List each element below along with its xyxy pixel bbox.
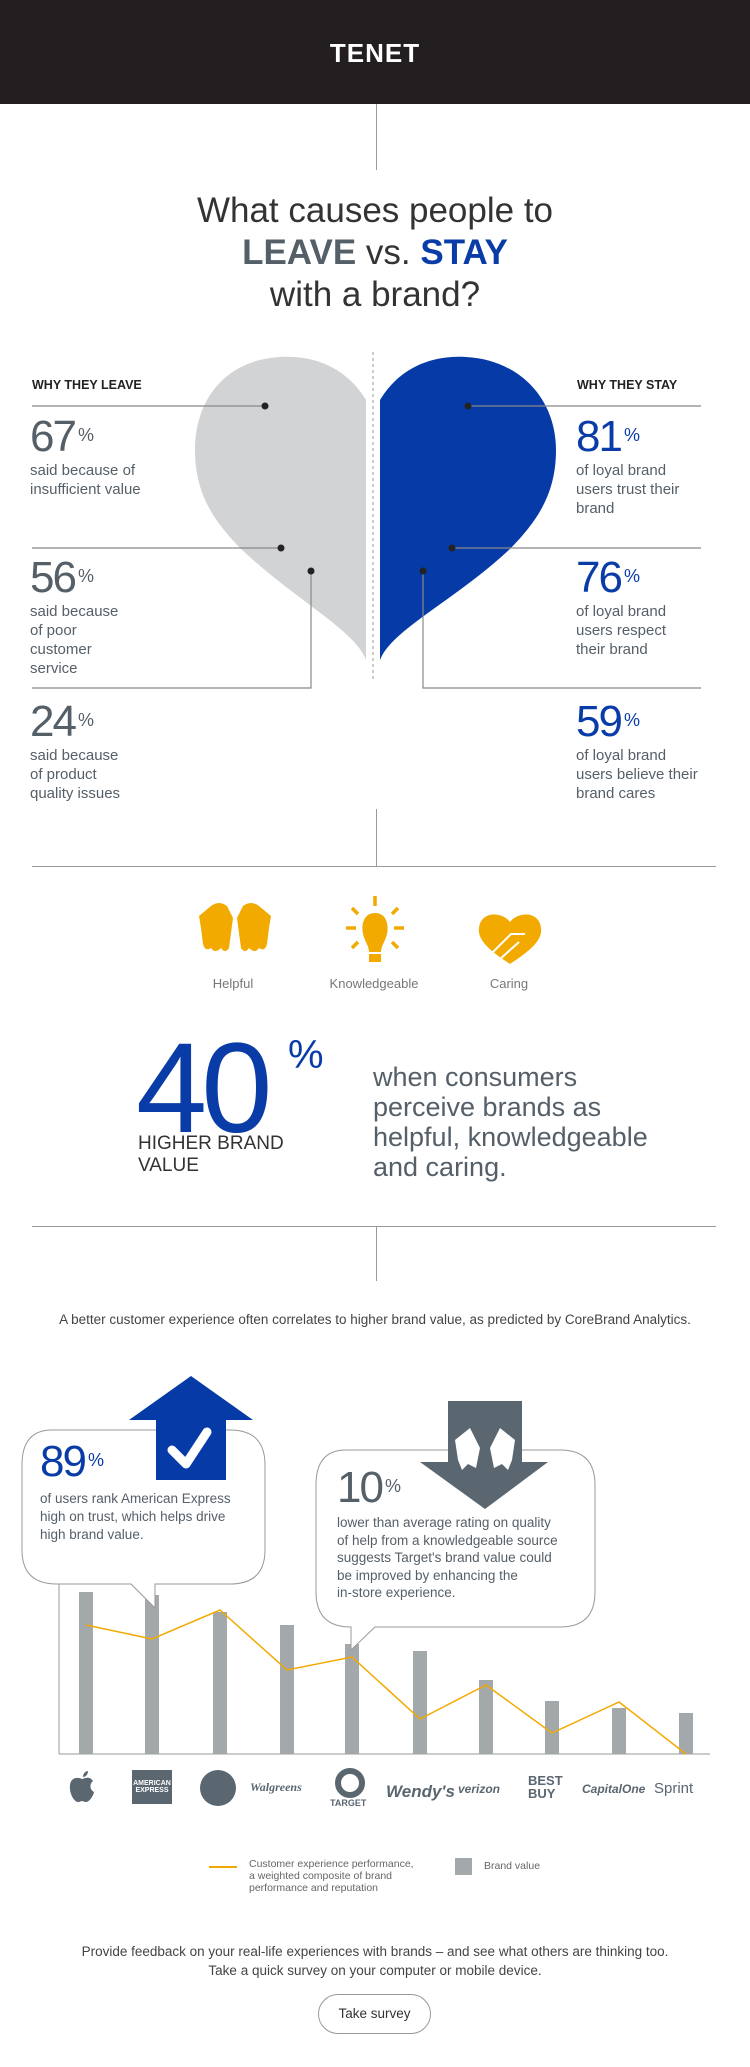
40% description: when consumers <box>373 1062 577 1092</box>
40% stat <box>136 1017 324 1176</box>
stat 76%: 76% <box>576 553 640 602</box>
stat 81%: brand <box>576 500 614 517</box>
stat 59%: of loyal brand <box>576 747 666 764</box>
title: LEAVE vs. STAY <box>242 233 508 272</box>
brand logos <box>70 1768 694 1808</box>
stat 56%: said because <box>30 603 118 620</box>
stat 76%: their brand <box>576 641 648 658</box>
40% stat: 40 <box>136 1017 266 1160</box>
callout text: 89%: of users rank American Express <box>40 1491 231 1506</box>
stat 56%: of poor <box>30 622 77 639</box>
callout: american express <box>22 1376 596 1651</box>
legend: performance and reputation <box>249 1882 378 1894</box>
stat 67%: 67% <box>30 412 94 461</box>
icon: caring heart hands <box>478 914 542 964</box>
stat 24% <box>30 697 120 802</box>
title: What causes people to <box>197 191 553 230</box>
brand logos: verizon <box>458 1782 500 1796</box>
callout text: 89%: 89% <box>40 1437 104 1486</box>
footer text <box>82 1944 668 1978</box>
icon: down arrow with hands <box>420 1401 548 1509</box>
stat 67%: said because of <box>30 462 135 479</box>
stat 56% <box>30 553 118 677</box>
stat 56%: service <box>30 660 78 677</box>
label: why they leave: WHY THEY LEAVE <box>32 378 142 392</box>
callout text: 89%: high brand value. <box>40 1527 144 1542</box>
legend: Brand value <box>484 1860 540 1872</box>
bar chart <box>58 1584 710 1755</box>
callout text: 89%: high on trust, which helps drive <box>40 1509 225 1524</box>
icon: up arrow with check <box>129 1376 253 1480</box>
footer text: Take a quick survey on your computer or mobile device. <box>208 1963 542 1978</box>
callout text: 10%: suggests Target's brand value could <box>337 1550 552 1565</box>
40% description <box>373 1062 648 1182</box>
button: take survey: Take survey <box>338 2006 411 2021</box>
stat 24%: 24% <box>30 697 94 746</box>
legend: a weighted composite of brand <box>249 1870 392 1882</box>
legend: Customer experience performance, <box>249 1858 414 1870</box>
title <box>197 191 553 314</box>
brand logos: CapitalOne <box>582 1782 645 1796</box>
stat 59%: users believe their <box>576 766 698 783</box>
stat 59% <box>576 697 698 802</box>
brand logos: AMERICAN EXPRESS <box>133 1780 171 1794</box>
stat 76% <box>576 553 666 658</box>
stat 59%: 59% <box>576 697 640 746</box>
legend <box>209 1858 540 1894</box>
stat 81% <box>576 412 680 517</box>
caption: A better customer experience often correlates to higher brand value, as predicted by CoreBrand Analytics. <box>59 1312 691 1327</box>
icon labels: Helpful <box>213 976 253 991</box>
callout text: 10% <box>337 1463 558 1600</box>
stat 67%: insufficient value <box>30 481 141 498</box>
stat 81%: of loyal brand <box>576 462 666 479</box>
heart right half blue <box>380 357 556 660</box>
text: Knowledgeable <box>330 976 418 991</box>
stat 24%: of product <box>30 766 97 783</box>
40% stat: HIGHER BRAND <box>138 1133 284 1154</box>
stat 76%: of loyal brand <box>576 603 666 620</box>
stat 59%: brand cares <box>576 785 655 802</box>
brand logos: Walgreens <box>250 1780 302 1794</box>
callout text: 10%: of help from a knowledgeable source <box>337 1532 558 1548</box>
stat 81%: 81% <box>576 412 640 461</box>
40% description: and caring. <box>373 1152 507 1182</box>
stat 76%: users respect <box>576 622 666 639</box>
label: why they stay: WHY THEY STAY <box>577 378 677 392</box>
40% stat: VALUE <box>138 1155 199 1176</box>
heart left half gray <box>195 357 366 660</box>
40% description: helpful, knowledgeable <box>373 1122 648 1152</box>
icon: helpful hands <box>199 903 271 951</box>
brand logos: Sprint <box>654 1780 693 1797</box>
40% description: perceive brands as <box>373 1092 601 1122</box>
40% stat: % <box>288 1033 324 1077</box>
stat 24%: quality issues <box>30 785 120 802</box>
stat 81%: users trust their <box>576 481 679 498</box>
stat 56%: customer <box>30 641 92 658</box>
text: Caring <box>490 976 528 991</box>
logo: TENET: TENET <box>330 38 420 68</box>
header bar <box>0 0 750 104</box>
brand logos: BEST <box>528 1773 563 1788</box>
footer text: Provide feedback on your real-life experiences with brands – and see what others are thinking too. <box>82 1944 668 1959</box>
brand logos: TARGET <box>330 1798 366 1808</box>
stat 24%: said because <box>30 747 118 764</box>
icon: lightbulb <box>346 896 404 962</box>
button: take survey <box>318 1994 431 2034</box>
stat 67% <box>30 412 141 498</box>
callout text: 10%: 10% <box>337 1463 401 1512</box>
brand logos: BUY <box>528 1786 555 1801</box>
callout text: 89% <box>40 1437 231 1542</box>
callout text: 10%: be improved by enhancing the <box>337 1568 518 1582</box>
brand logos: Wendy's <box>386 1782 455 1801</box>
callout text: 10%: lower than average rating on quality <box>337 1515 551 1530</box>
stat 56%: 56% <box>30 553 94 602</box>
callout text: 10%: in-store experience. <box>337 1585 456 1600</box>
title: with a brand? <box>270 275 480 314</box>
heart chart <box>32 352 701 689</box>
